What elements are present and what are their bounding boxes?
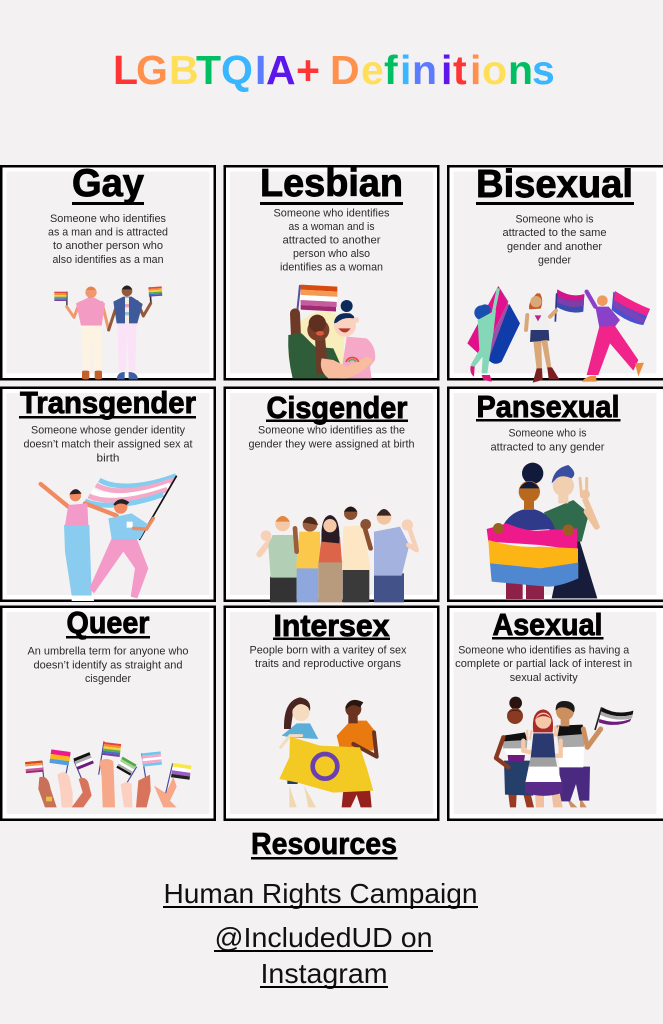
illustration: two people with transgender flag <box>41 476 177 601</box>
heading: Transgender: Transgender <box>20 385 196 420</box>
illustration: three people with bisexual flags <box>467 286 650 383</box>
definition: Cisgender: gender they were assigned at birth <box>248 439 414 451</box>
definition: Pansexual: Someone who is <box>508 428 587 440</box>
title: A <box>266 47 296 93</box>
definition: Lesbian: as a woman and is <box>288 221 375 233</box>
heading: Queer: Queer <box>66 605 150 640</box>
resource link: Human Rights Campaign: Human Rights Campaign <box>164 878 478 909</box>
definition: Queer: doesn’t identify as straight and <box>34 660 182 672</box>
panel: Queer <box>0 605 216 821</box>
definition: Intersex: traits and reproductive organs <box>255 658 401 670</box>
definition: Queer: cisgender <box>85 673 131 685</box>
definition: Gay: Someone who identifies <box>50 213 166 225</box>
title: i <box>470 47 481 93</box>
title: s <box>532 47 555 93</box>
definition: Transgender: birth <box>96 452 120 464</box>
title: n <box>508 47 533 93</box>
panel: Asexual <box>447 606 663 821</box>
resource link: IncludedUD on Instagram <box>214 922 433 989</box>
heading: Intersex: Intersex <box>274 608 390 643</box>
panel: Lesbian <box>224 162 440 380</box>
title: B <box>169 47 199 93</box>
heading: Bisexual: Bisexual <box>476 163 633 206</box>
definition: Asexual: sexual activity <box>510 672 578 684</box>
definition: Asexual <box>455 645 632 684</box>
definition: Intersex <box>250 645 407 670</box>
title: t <box>453 47 467 93</box>
illustration: two men holding hands with rainbow flags <box>54 285 162 379</box>
title: + <box>296 47 320 93</box>
title: i <box>400 47 411 93</box>
panel: Gay <box>0 162 216 380</box>
definition: Gay: to another person who <box>53 240 163 252</box>
resources heading: Resources <box>251 826 397 861</box>
title: e <box>361 47 384 93</box>
definition: Pansexual <box>490 428 605 453</box>
title: T <box>196 47 221 93</box>
resource link: IncludedUD on Instagram: @IncludedUD on <box>214 922 432 953</box>
heading: Asexual: Asexual <box>492 607 602 642</box>
definition: Lesbian: attracted to another <box>282 235 381 247</box>
illustration: three people in asexual colours with flag <box>496 697 633 807</box>
panel: Pansexual <box>447 386 663 602</box>
title: f <box>384 47 398 93</box>
heading: Gay: Gay <box>72 162 144 205</box>
resource link: IncludedUD on Instagram: Instagram <box>260 958 388 989</box>
illustration: two women hugging with lesbian flag <box>288 285 375 378</box>
illustration: two people holding intersex flag <box>279 697 377 807</box>
title: G <box>136 47 168 93</box>
title: Q <box>221 47 253 93</box>
definition: Queer <box>28 646 188 685</box>
illustration: two people holding pansexual flag <box>487 463 597 599</box>
definition: Transgender: doesn’t match their assigned sex at <box>24 439 192 451</box>
title: I <box>255 47 266 93</box>
definition: Asexual: complete or partial lack of interest in <box>455 658 632 670</box>
definition: Lesbian: person who also <box>293 248 370 260</box>
definition: Transgender: Someone whose gender identity <box>31 425 185 437</box>
definition: Gay: as a man and is attracted <box>48 226 168 238</box>
definition: Pansexual: attracted to any gender <box>490 441 605 453</box>
definition: Cisgender: Someone who identifies as the <box>258 425 405 437</box>
panel: Bisexual <box>447 163 663 383</box>
title: n <box>412 47 437 93</box>
illustration: hands raising pride flags <box>25 741 191 807</box>
definition: Bisexual: Someone who is <box>516 214 594 226</box>
panel: Transgender <box>0 385 216 602</box>
title: o <box>482 47 507 93</box>
definition: Bisexual: gender and another <box>507 241 602 253</box>
definition: Lesbian <box>274 208 390 274</box>
title: D <box>330 47 360 93</box>
definition: Queer: An umbrella term for anyone who <box>28 646 188 658</box>
definition: Bisexual <box>502 214 606 267</box>
definition: Lesbian: Someone who identifies <box>274 208 390 220</box>
title: L <box>113 47 138 93</box>
panel: Cisgender <box>224 386 440 602</box>
definition: Intersex: People born with a varitey of sex <box>250 645 407 657</box>
definition: Gay: also identifies as a man <box>52 254 164 266</box>
heading: Pansexual: Pansexual <box>476 389 620 424</box>
title: i <box>441 47 452 93</box>
heading: Cisgender: Cisgender <box>266 390 408 425</box>
illustration: five waving people <box>259 507 417 602</box>
definition: Bisexual: attracted to the same <box>502 227 606 239</box>
definition: Bisexual: gender <box>538 255 571 267</box>
heading: Lesbian: Lesbian <box>260 162 403 205</box>
definition: Asexual: Someone who identifies as having a <box>458 645 630 657</box>
definition: Gay <box>48 213 168 266</box>
definition: Cisgender <box>248 425 414 451</box>
definition: Transgender <box>24 425 192 464</box>
panel: Intersex <box>224 606 440 821</box>
definition: Lesbian: identifies as a woman <box>280 262 383 274</box>
